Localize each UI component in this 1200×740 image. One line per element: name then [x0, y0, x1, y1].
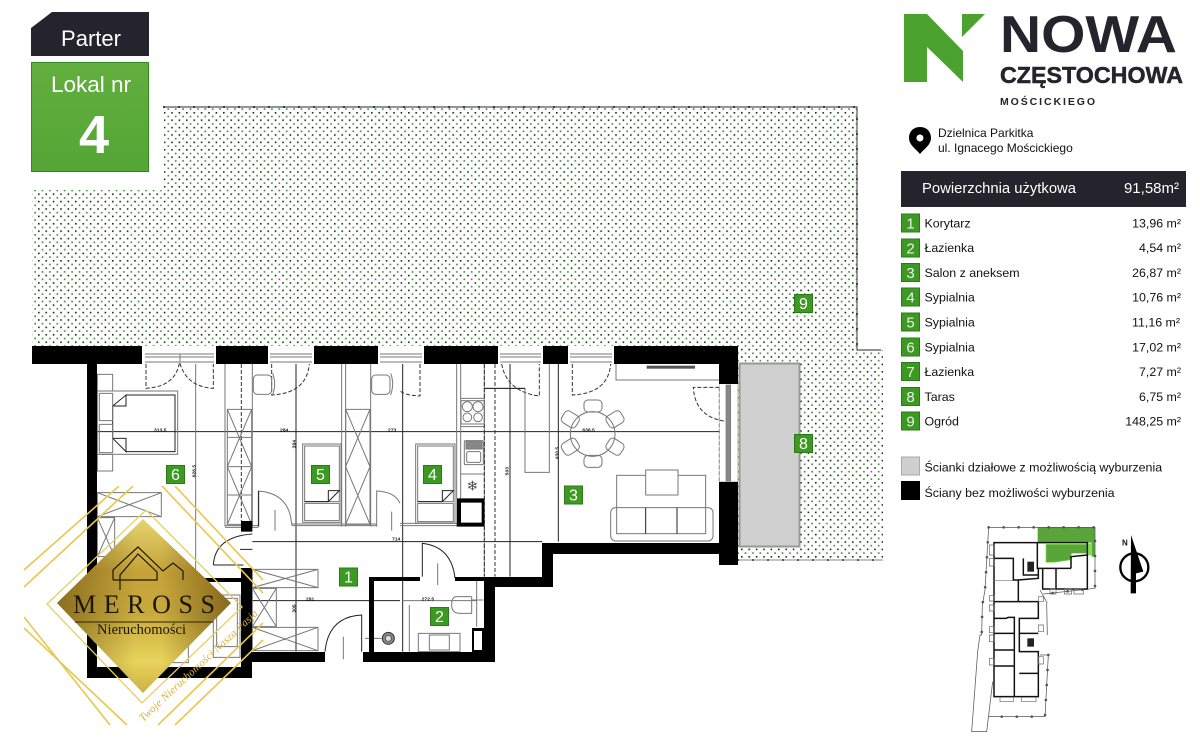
- walls: [32, 346, 738, 678]
- floor label: [31, 12, 149, 56]
- row 6: 6: [906, 340, 915, 356]
- Meross logo watermark: [24, 486, 263, 725]
- row 8: 8: [906, 389, 915, 406]
- row 8: 6,75 m²: [1139, 390, 1181, 404]
- row 3: [902, 264, 1181, 282]
- row 9: 148,25 m²: [1125, 414, 1181, 428]
- furniture and fittings, left part: 714: [392, 537, 401, 543]
- terrace: [740, 364, 800, 546]
- sofa: [611, 470, 713, 541]
- room badge 3: 3: [569, 488, 578, 504]
- floor plan: [32, 346, 738, 678]
- row 2: 2: [906, 240, 915, 258]
- room badge 4: [424, 466, 442, 484]
- room badge 9: 9: [799, 296, 808, 313]
- room badge 5: 5: [316, 467, 325, 484]
- unit number box: 4: [79, 105, 109, 165]
- room list: [902, 214, 1181, 430]
- room badge 5: [312, 466, 330, 484]
- balcony window: [726, 385, 731, 482]
- address: Dzielnica Parkitka: [938, 126, 1034, 140]
- logo word NOWA: NOWA: [1000, 6, 1177, 64]
- row 6: 17,02 m²: [1132, 340, 1181, 354]
- room badge 8: [794, 434, 812, 453]
- usable area header: [901, 171, 1186, 207]
- row 2: Łazienka: [924, 241, 974, 255]
- room badge 1: 1: [344, 570, 353, 586]
- address: ul. Ignacego Mościckiego: [938, 141, 1073, 155]
- row 9: 9: [906, 414, 915, 430]
- row 8: [902, 388, 1181, 406]
- room badge 2: [430, 608, 448, 626]
- floor plan white interior: [97, 364, 719, 667]
- row 9: Ogród: [924, 414, 959, 428]
- furniture and fittings, left part: 284: [280, 427, 289, 433]
- legend: fixed walls: Ściany bez możliwości wyburzenia: [924, 485, 1115, 500]
- room badge 4: 4: [428, 467, 437, 484]
- row 4: 4: [906, 290, 915, 306]
- balconies: [989, 545, 1083, 702]
- furniture and fittings, right part: 503: [505, 467, 511, 475]
- furniture and fittings, right part: 638.5: [582, 427, 595, 433]
- row 6: [902, 338, 1181, 356]
- brand tagline: Twoje Nieruchomości Nasza Pasja: [137, 607, 261, 724]
- row 3: Salon z aneksem: [924, 266, 1020, 280]
- furniture and fittings, right part: [400, 364, 738, 652]
- row 8: Taras: [924, 390, 955, 404]
- dimension labels: 272.5: [422, 596, 434, 602]
- desk chairs: [253, 373, 393, 395]
- row 7: Łazienka: [924, 365, 974, 379]
- logo word MOSCICKIEGO: MOŚCICKIEGO: [1000, 95, 1095, 108]
- brand subtitle: Nieruchomości: [97, 622, 186, 638]
- row 1: [902, 214, 1181, 232]
- row 1: Korytarz: [924, 216, 971, 230]
- furniture and fittings, left part: [97, 363, 401, 663]
- furniture and fittings, left part: 394: [292, 440, 298, 448]
- unit number box: Lokal nr: [51, 72, 132, 97]
- room badge 9: [794, 294, 812, 313]
- row 3: 26,87 m²: [1132, 266, 1181, 280]
- fridge symbol: ❄: [467, 479, 478, 494]
- north arrow: N: [1122, 539, 1128, 548]
- developer logo: [904, 6, 1183, 108]
- row 7: 7: [906, 364, 915, 381]
- building outline: [994, 543, 1088, 697]
- window frames: [142, 346, 614, 364]
- unit number box: [32, 62, 148, 172]
- room badge 2: 2: [435, 609, 444, 626]
- furniture and fittings, left part: 626.5: [191, 465, 197, 477]
- gold diamond: [57, 519, 231, 693]
- room badge 8: 8: [799, 436, 808, 453]
- kitchen sink: [464, 441, 483, 465]
- address: [938, 126, 1073, 155]
- row 7: [902, 362, 1181, 381]
- north arrow: [1120, 535, 1148, 593]
- highlighted unit: [1038, 527, 1095, 557]
- gold outer stripes: [24, 486, 263, 725]
- site key plan: [972, 527, 1095, 732]
- row 2: [902, 239, 1181, 258]
- row 4: Sypialnia: [924, 290, 975, 304]
- row 5: Sypialnia: [924, 316, 975, 330]
- location pin icon: [909, 127, 931, 154]
- row 4: [902, 288, 1181, 306]
- brand rule: [75, 622, 213, 623]
- room badge 6: [166, 466, 184, 484]
- site fence: [972, 527, 1095, 732]
- legend: fixed walls: [901, 481, 1115, 500]
- kitchen shaft: [457, 498, 484, 527]
- row 1: 1: [906, 216, 915, 232]
- furniture and fittings, left part: 291: [306, 596, 315, 602]
- cooktop: [461, 401, 484, 424]
- bed in room 4: [416, 444, 455, 523]
- logo mark: [904, 14, 985, 82]
- stair cores: [1027, 562, 1034, 572]
- room badge 3: [564, 486, 582, 504]
- row 3: 3: [906, 265, 915, 282]
- dimension labels: 313.5: [154, 427, 167, 433]
- floor label: Parter: [61, 26, 121, 51]
- brand name: MEROSS: [73, 590, 215, 619]
- logo word CZESTOCHOWA: CZĘSTOCHOWA: [1000, 62, 1183, 88]
- room badge 1: [340, 568, 358, 586]
- legend: removable walls: Ścianki działowe z możliwością wyburzenia: [924, 460, 1162, 474]
- row 4: 10,76 m²: [1132, 290, 1181, 304]
- row 5: [902, 313, 1180, 332]
- bathroom 2 fittings: [422, 543, 455, 578]
- room badge 6: 6: [171, 467, 180, 484]
- furniture and fittings, right part: 430.5: [554, 447, 560, 459]
- usable area header: Powierzchnia użytkowa: [922, 180, 1077, 197]
- row 6: Sypialnia: [924, 340, 975, 354]
- living room cabinet: [616, 364, 719, 380]
- row 9: [902, 412, 1181, 430]
- furniture and fittings, left part: 273: [388, 427, 397, 433]
- usable area header: 91,58m²: [1124, 180, 1179, 197]
- house icon: [113, 547, 183, 590]
- row 5: 11,16 m²: [1132, 316, 1180, 330]
- furniture and fittings, left part: 305: [292, 604, 298, 613]
- row 7: 7,27 m²: [1139, 365, 1181, 379]
- row 5: 5: [906, 314, 915, 332]
- row 1: 13,96 m²: [1132, 216, 1181, 230]
- garden area: [32, 107, 883, 560]
- dining table: [560, 400, 626, 467]
- row 2: 4,54 m²: [1139, 241, 1181, 255]
- gold inner outline: [47, 510, 242, 703]
